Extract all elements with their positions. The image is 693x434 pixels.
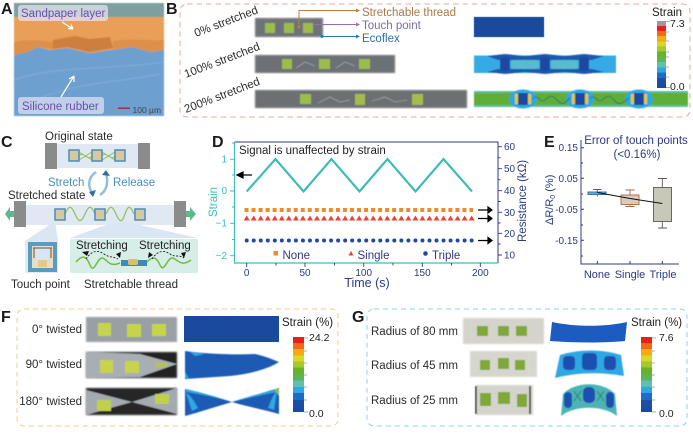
zoom wedges: [25, 221, 198, 241]
panel B: stretching: [166, 1, 690, 117]
label B: B: [166, 1, 178, 18]
y title: 0: [550, 195, 557, 199]
legend: Single: [358, 250, 389, 262]
trend line: [597, 192, 662, 204]
stretch label: Stretch: [48, 177, 84, 189]
row labels: Radius of 25 mm: [371, 395, 458, 407]
panel F: twisting: [1, 309, 338, 426]
right axis ticks: [504, 142, 516, 262]
release label: Release: [113, 177, 155, 189]
row labels: 200% stretched: [183, 76, 262, 116]
legend: [274, 250, 460, 262]
row labels: Radius of 80 mm: [371, 326, 458, 338]
annotation: Signal is unaffected by strain: [239, 145, 386, 157]
row labels: 0% stretched: [193, 5, 260, 40]
label: silicone rubber: Silicone rubber: [22, 101, 99, 113]
title: [584, 135, 688, 161]
y title: (%): [544, 175, 556, 195]
left axis ticks: −1: [216, 218, 227, 230]
x labels: Triple: [649, 269, 677, 281]
x axis ticks: 100: [355, 268, 372, 279]
callout: ecoflex: [320, 33, 400, 45]
colorbar G: [631, 317, 682, 420]
y ticks: -0.05: [555, 205, 578, 216]
scale bar: 100 µm: [132, 105, 161, 115]
callout: ecoflex: Ecoflex: [362, 33, 400, 45]
x labels: None: [584, 269, 610, 281]
colorbar F: 0.0: [309, 408, 324, 420]
legend: None: [282, 250, 310, 262]
y ticks: [555, 143, 578, 247]
FEA: 180°: [185, 388, 279, 416]
box: single: [621, 190, 639, 207]
right axis ticks: 60: [504, 142, 516, 153]
left axis ticks: 0: [221, 186, 227, 197]
original device: [45, 143, 150, 169]
colorbar G: 7.6: [659, 332, 674, 344]
row labels: 180° twisted: [19, 396, 82, 408]
label: sandpaper layer: Sandpaper layer: [21, 8, 106, 20]
photo: 0%: [255, 18, 323, 37]
panel D: chart: [208, 134, 529, 290]
x labels: [584, 269, 677, 281]
arrow: silicone: [61, 76, 74, 97]
right axis ticks: 50: [504, 164, 516, 175]
colorbar F: Strain (%): [282, 317, 333, 329]
FEA: 25 mm: [561, 384, 617, 416]
y ticks: 0.15: [559, 143, 578, 154]
row labels: Radius of 45 mm: [371, 360, 458, 372]
photo: 180°: [86, 388, 177, 415]
row labels: [183, 5, 262, 116]
arrow: sandpaper: [62, 22, 73, 29]
row labels: 0° twisted: [32, 324, 82, 336]
legend: Triple: [432, 250, 460, 262]
row labels: [371, 326, 458, 407]
box: none: [588, 190, 606, 196]
y ticks: 0.05: [559, 174, 578, 185]
photo: 45 mm: [470, 351, 537, 377]
colorbar B: 7.3: [670, 18, 685, 30]
left axis ticks: −2: [216, 251, 227, 262]
right axis ticks: 30: [504, 208, 516, 219]
right axis ticks: 10: [504, 250, 516, 262]
arrow: strain axis: [237, 172, 252, 178]
panel G: bending: [352, 309, 687, 426]
inset: stretchable thread: [70, 239, 198, 273]
colorbar G: Strain (%): [631, 317, 682, 329]
series: none: [244, 208, 473, 212]
label C: C: [1, 134, 13, 151]
title: (<0.16%): [614, 149, 661, 161]
FEA: 80 mm: [550, 322, 627, 342]
x axis title: Time (s): [344, 276, 390, 290]
left axis title: Strain: [208, 187, 220, 217]
caption: touch point: Touch point: [11, 279, 71, 291]
x axis ticks: [244, 268, 489, 279]
right axis ticks: 40: [504, 186, 516, 197]
photo: 100%: [255, 55, 395, 73]
callout: stretchable thread: Stretchable thread: [362, 7, 456, 19]
photo: 80 mm: [463, 318, 544, 344]
photo: 25 mm: [476, 385, 533, 415]
strain line: [247, 159, 472, 192]
FEA: 45 mm: [555, 350, 624, 378]
left axis ticks: 1: [221, 154, 227, 166]
left axis ticks: [216, 154, 227, 262]
row labels: [19, 324, 82, 408]
x axis ticks: 150: [414, 268, 431, 279]
callout: touch point: Touch point: [362, 20, 422, 32]
FEA: 0%: [474, 17, 544, 37]
x labels: Single: [615, 269, 645, 281]
photo: 0°: [86, 317, 177, 342]
axes frame: [230, 142, 502, 267]
right axis ticks: 20: [504, 229, 516, 240]
y ticks: -0.15: [555, 236, 578, 247]
scale bar: [118, 105, 161, 115]
heading: stretched state: Stretched state: [8, 190, 85, 202]
colorbar G: 0.0: [659, 408, 674, 420]
row labels: 90° twisted: [26, 359, 82, 371]
stretched device: [5, 201, 196, 227]
inset: stretchable thread: Stretching: [139, 240, 191, 252]
colorbar B: [652, 7, 685, 93]
panel A: micrograph: [1, 1, 164, 116]
box: triple: [654, 178, 672, 228]
dashed border: [17, 309, 338, 426]
dashed border: [180, 4, 690, 117]
label F: F: [1, 309, 11, 326]
arrow: none: [478, 207, 492, 213]
arrow: single: [478, 216, 492, 222]
FEA: 200%: [474, 90, 688, 108]
callout: stretchable thread: [298, 7, 456, 28]
heading: original state: Original state: [45, 131, 113, 143]
x axis ticks: 0: [244, 268, 250, 279]
FEA: 100%: [474, 54, 616, 74]
axes: [581, 140, 679, 264]
panel C: schematic: [1, 131, 198, 291]
label E: E: [544, 134, 555, 151]
y title: ΔR/R: [544, 199, 556, 225]
photo: 200%: [255, 90, 467, 108]
FEA: 90°: [185, 351, 279, 379]
label A: A: [1, 1, 13, 18]
series: single: [243, 215, 475, 222]
photo: 90°: [86, 352, 177, 378]
series: triple: [247, 238, 473, 242]
panel E: box plot: [544, 134, 688, 281]
colorbar B: Strain: [652, 7, 682, 19]
row labels: 100% stretched: [183, 41, 262, 81]
caption: stretchable thread: Stretchable thread: [84, 279, 178, 291]
right axis title: Resistance (kΩ): [517, 160, 529, 242]
inset: touch point: [25, 241, 58, 273]
icon: cycle arrows: [89, 170, 110, 197]
colorbar F: 24.2: [309, 332, 330, 344]
colorbar B: 0.0: [670, 81, 685, 93]
micrograph image: [14, 3, 164, 116]
dashed border: [367, 309, 687, 426]
x axis ticks: 200: [472, 268, 489, 279]
inset: stretchable thread: Stretching: [76, 240, 128, 252]
label D: D: [212, 134, 224, 151]
title: Error of touch points: [584, 135, 688, 147]
callout: touch point: [313, 20, 422, 32]
x axis ticks: 50: [299, 268, 311, 279]
colorbar F: [282, 317, 333, 420]
label G: G: [352, 309, 364, 326]
label: silicone rubber: [18, 97, 104, 114]
arrow: triple: [478, 238, 492, 244]
FEA: 0°: [184, 316, 279, 342]
